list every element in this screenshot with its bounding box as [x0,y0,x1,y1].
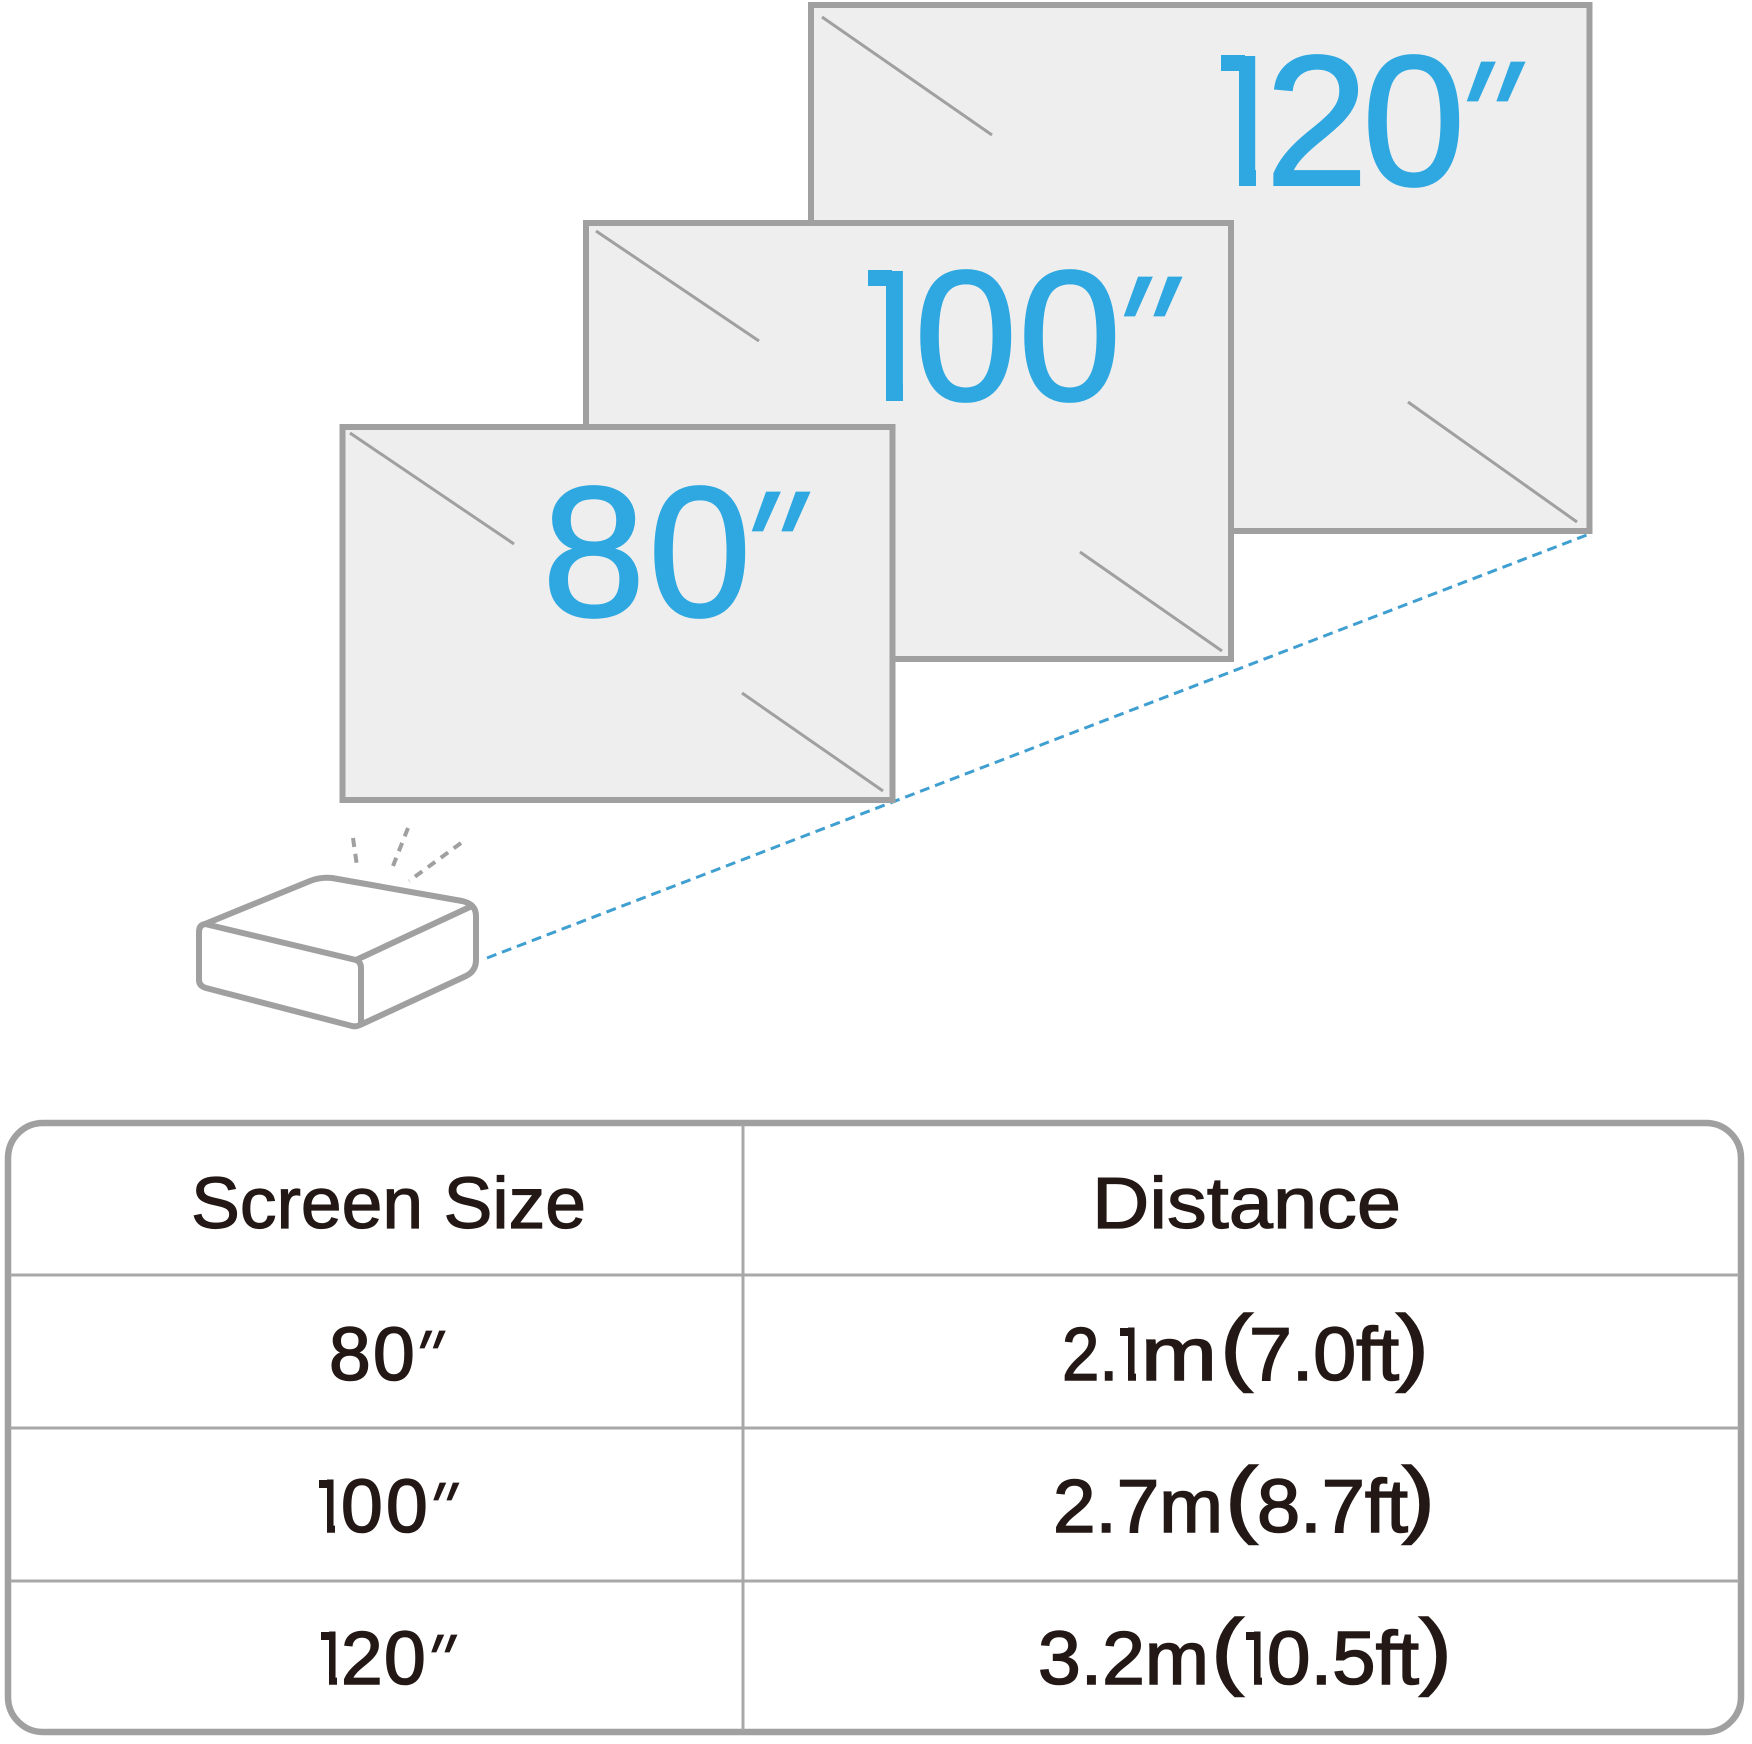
panel: 80 inch screen: " [692,452,834,657]
row: 80 inch distance: 1 [1108,1312,1150,1396]
panel: 120 inch screen: 1 [1191,18,1294,225]
row: 100 inch size: 0 [341,1464,383,1548]
panel: 100 inch screen: 0 [1018,233,1121,440]
table: screen size and distance [8,1123,1741,1732]
panel: 100 inch screen [586,223,1231,659]
row: 120 inch size: 2 [341,1616,383,1700]
row: 100 inch distance: 8.7ft [1257,1464,1408,1548]
row: 80 inch distance: ( [1220,1299,1253,1394]
row: 100 inch distance: ( [1225,1451,1258,1546]
row: 120 inch size: " [404,1617,468,1709]
row: 80 inch distance: m [1141,1312,1217,1396]
row: 120 inch distance [1040,1616,1447,1698]
panel: 120 inch screen: 2 [1265,18,1368,225]
panel: 80 inch screen: 8 [542,449,645,656]
row: 80 inch size: " [393,1313,456,1405]
table header: Distance: Distance [1092,1164,1401,1244]
panel: 100 inch screen: " [1064,237,1206,442]
dashed projection line [487,533,1592,958]
panel: 80 inch screen: 0 [648,449,751,656]
row: 80 inch distance [1064,1312,1424,1394]
row: 100 inch distance: 2.7m [1053,1464,1223,1548]
row: 80 inch size [329,1312,456,1405]
row: 100 inch size: " [406,1465,470,1557]
panel: 100 inch screen: 1 [839,233,942,440]
panel: 80 inch screen [342,427,892,800]
icon: projector [199,828,476,1026]
row: 120 inch distance: ) [1419,1603,1452,1698]
row: 120 inch size [321,1630,458,1686]
row: 120 inch distance: 0.5ft [1267,1616,1419,1700]
panel: 120 inch screen [811,5,1590,531]
row: 100 inch distance: ) [1402,1451,1435,1546]
icon: light rays [353,828,461,881]
panel: 100 inch screen: 0 [914,233,1017,440]
row: 80 inch distance: 2. [1062,1312,1118,1396]
row: 120 inch distance: 3.2m [1038,1616,1209,1700]
row: 80 inch distance: 7.0ft [1249,1312,1399,1396]
row: 100 inch size: 1 [307,1464,349,1548]
table header: Screen Size: Screen Size [191,1164,586,1244]
row: 120 inch distance: 1 [1234,1616,1276,1700]
row: 120 inch size: 0 [384,1616,426,1700]
row: 80 inch distance: ) [1396,1299,1429,1394]
row: 120 inch size: 1 [309,1616,351,1700]
row: 80 inch size: 0 [373,1312,415,1396]
row: 100 inch size [319,1478,460,1534]
row: 100 inch size: 0 [386,1464,428,1548]
row: 120 inch distance: ( [1211,1603,1244,1698]
panel: 120 inch screen: 0 [1362,18,1465,225]
panel: 120 inch screen: " [1407,22,1549,227]
row: 80 inch size: 8 [329,1312,371,1396]
